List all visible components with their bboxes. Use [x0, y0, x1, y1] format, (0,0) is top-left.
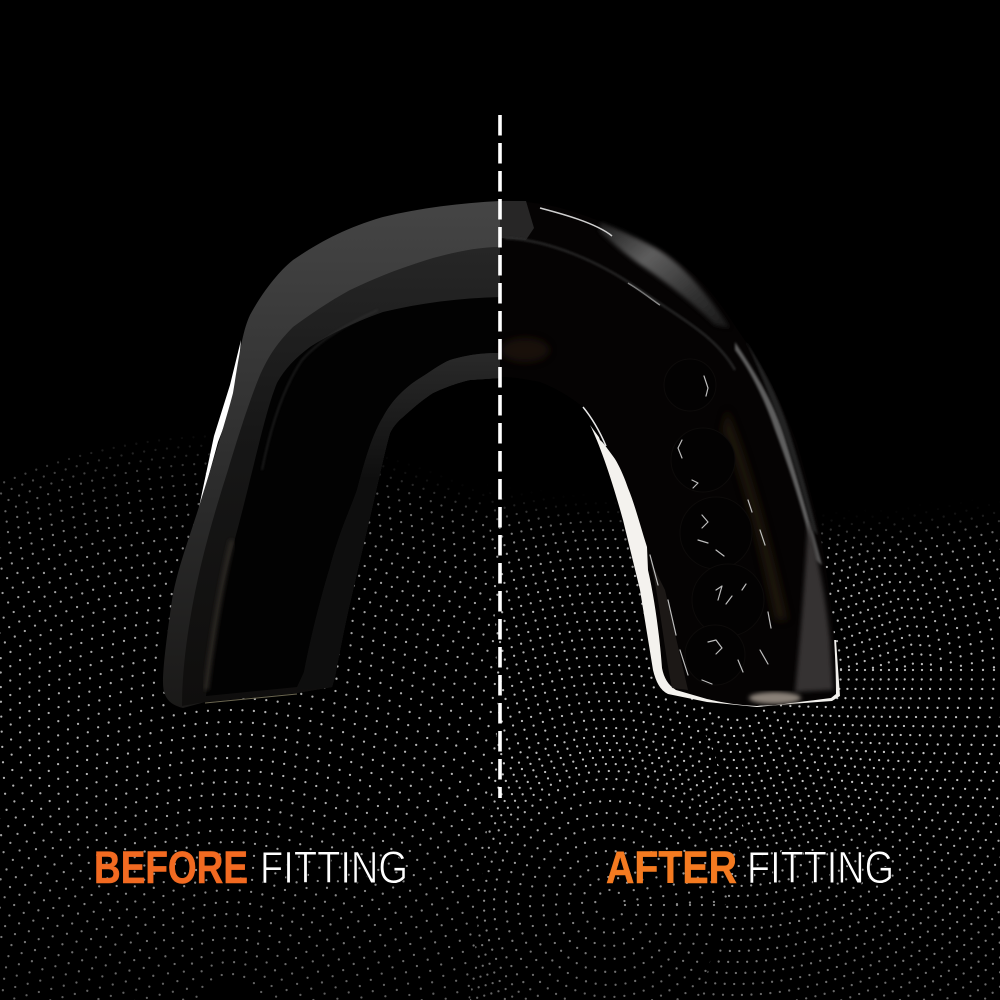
lower left brown panel	[650, 560, 688, 690]
inner brown shade	[206, 540, 232, 690]
label: before fitting	[94, 842, 408, 893]
outer dim band	[745, 340, 818, 535]
before word: BEFORE	[94, 842, 248, 893]
brown interior tone	[722, 410, 788, 620]
white edge sliver	[199, 340, 241, 507]
dark body silhouette	[500, 200, 836, 706]
inner lip	[297, 353, 500, 690]
dark teeth impressions	[664, 359, 764, 685]
tooth glints	[650, 376, 771, 684]
tooth 4	[692, 564, 764, 636]
mouthguard before fitting	[163, 201, 500, 708]
after word: AFTER	[606, 842, 737, 893]
tooth 3	[680, 497, 752, 569]
ridge highlights	[540, 208, 660, 305]
upper ridge line	[505, 238, 735, 370]
lower side panel	[795, 520, 833, 692]
bottom edge highlight	[205, 694, 297, 703]
outer glossy strip	[735, 342, 822, 565]
left fold gray at centre	[500, 201, 534, 240]
tooth 5	[685, 625, 745, 685]
bottom light patch	[749, 692, 801, 704]
inner rib highlight	[262, 310, 378, 470]
rim edge glint	[583, 407, 606, 446]
brown centre patch	[501, 338, 549, 362]
tooth 2	[671, 428, 735, 492]
tooth 1	[664, 359, 716, 411]
groove band	[182, 247, 500, 706]
mouthguard after fitting	[500, 200, 840, 707]
label: after fitting	[606, 842, 894, 893]
fitting word: FITTING	[747, 842, 894, 893]
dashed divider	[498, 115, 502, 798]
fitting word: FITTING	[260, 842, 408, 893]
outer band silhouette	[163, 201, 500, 708]
inner cavity	[206, 297, 500, 696]
dotted wave field	[0, 436, 1000, 1000]
white backing rim	[590, 425, 840, 707]
top glossy band	[600, 222, 730, 328]
